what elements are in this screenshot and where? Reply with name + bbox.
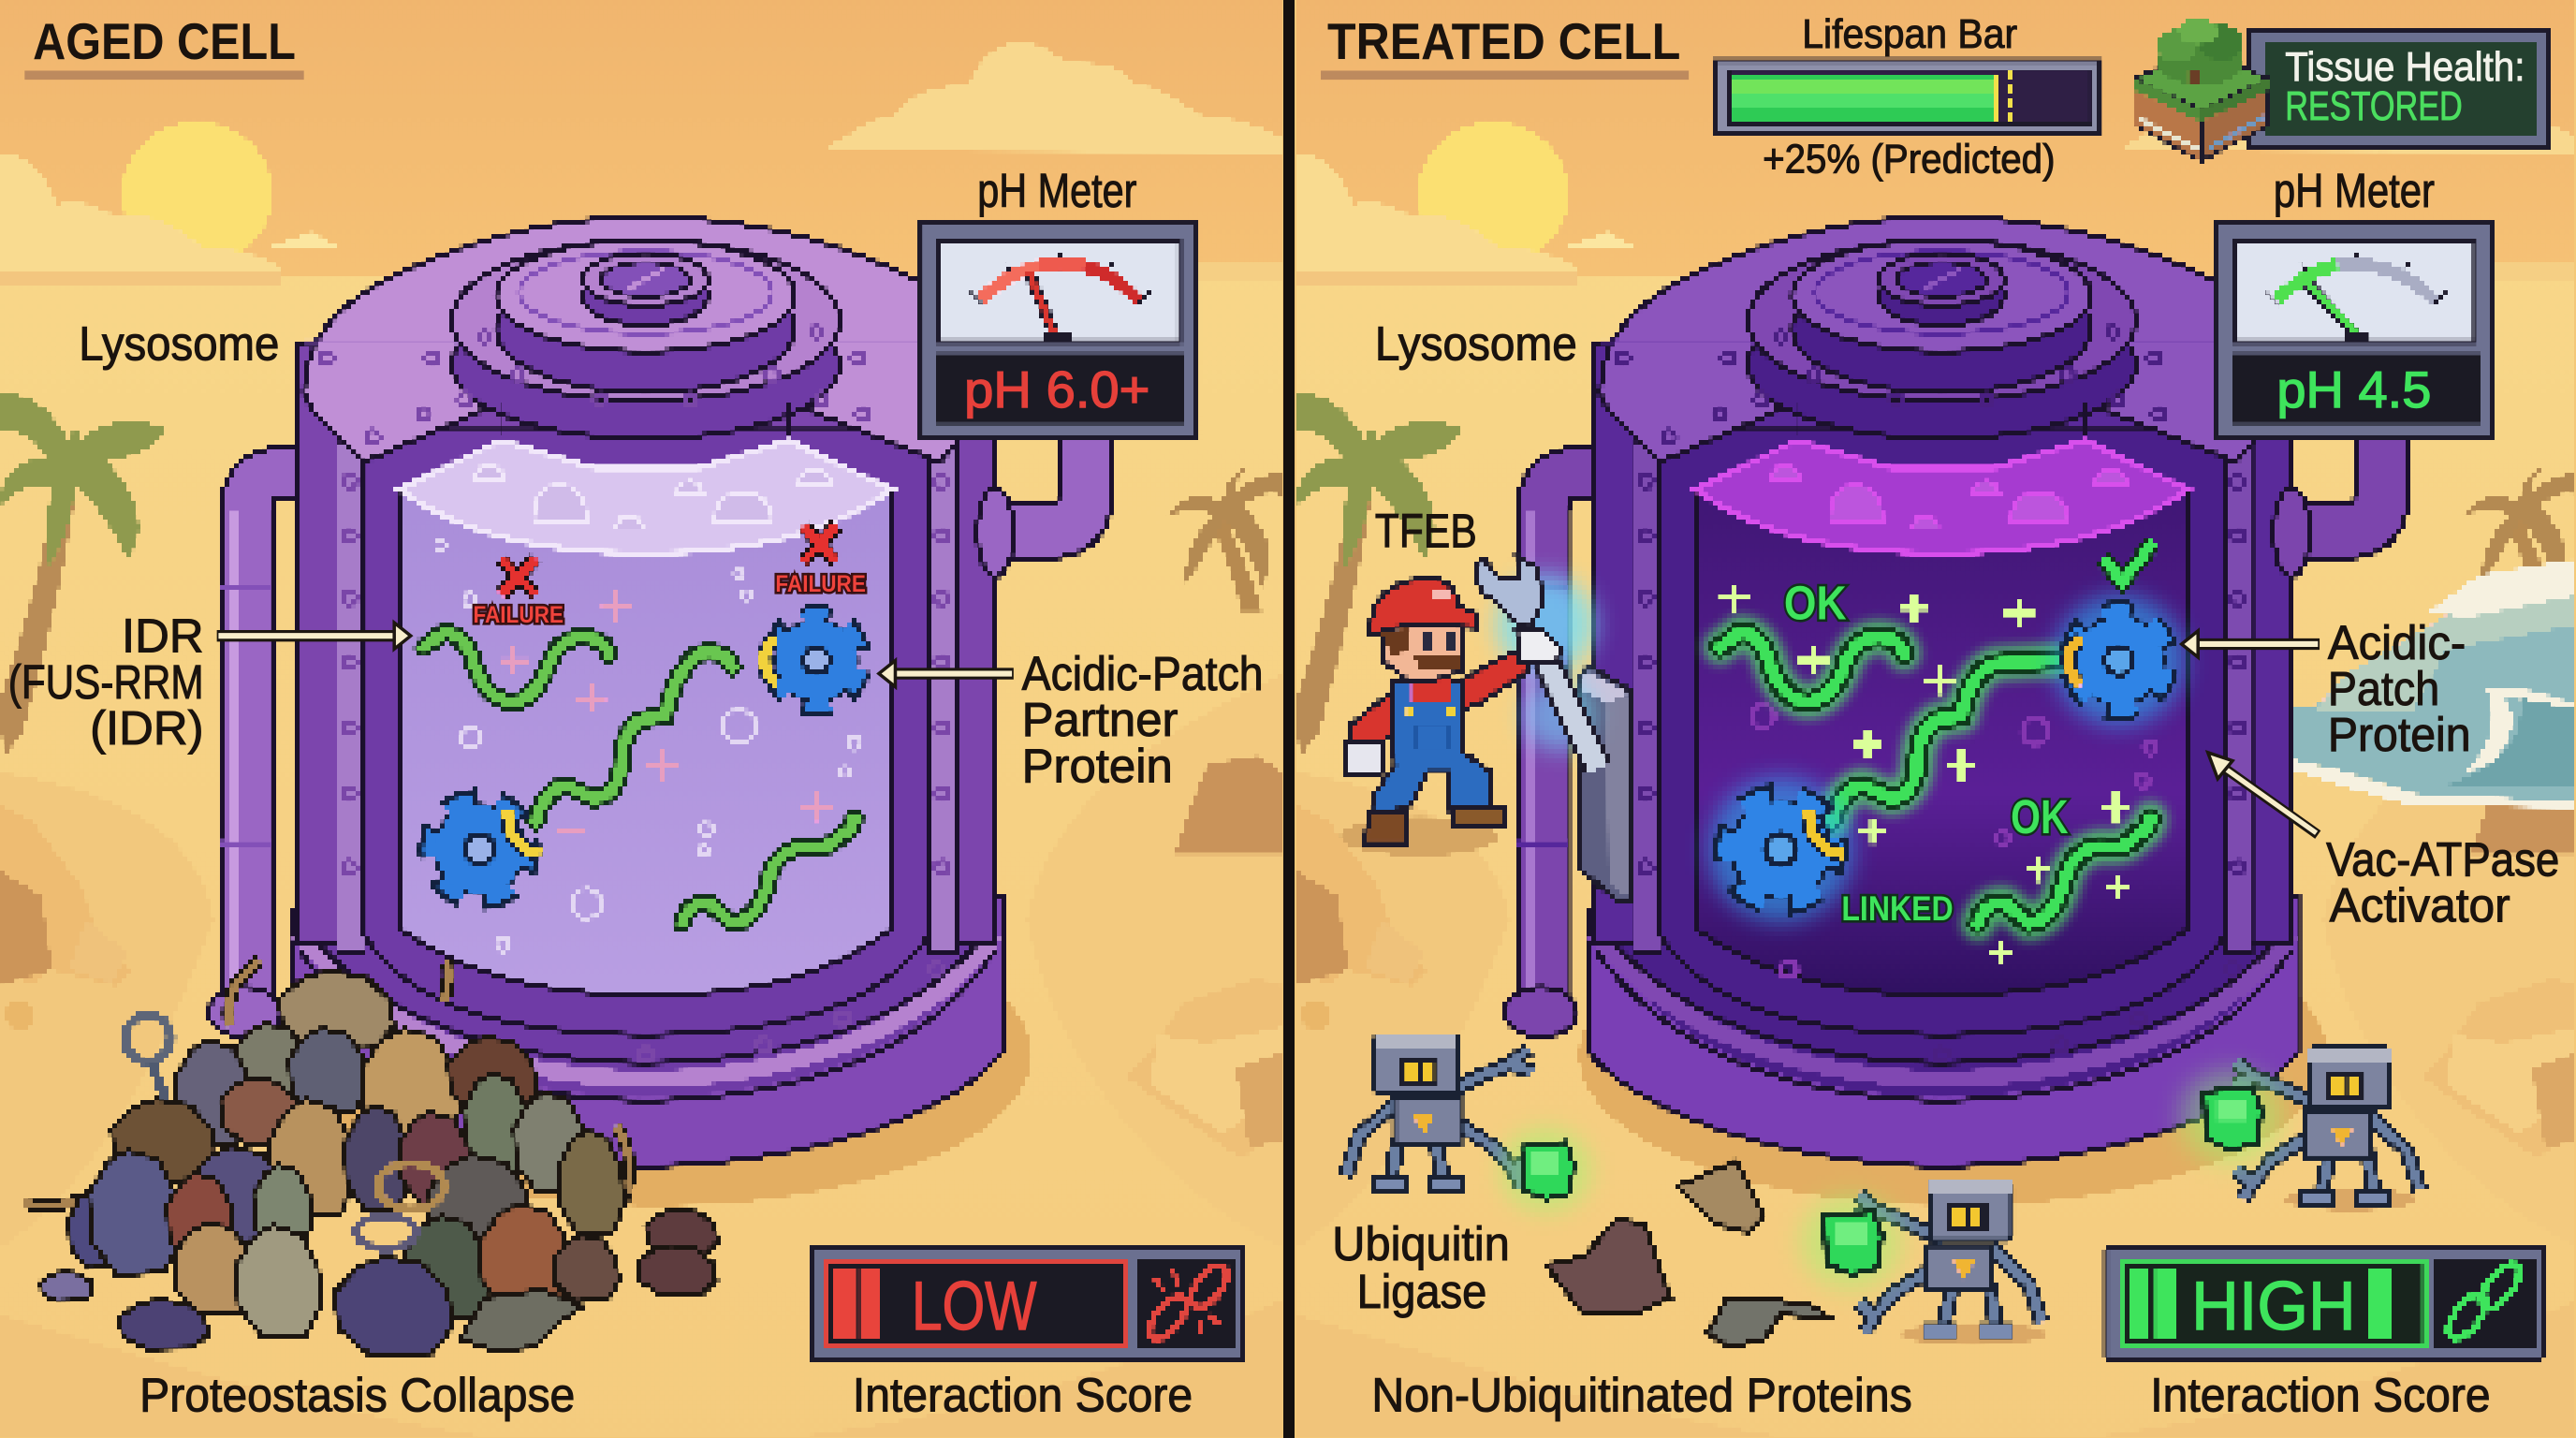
glowing gear proteins (1708, 594, 2185, 922)
linked tag: LINKED (1841, 889, 1954, 928)
bubbles, aged (435, 540, 861, 951)
label: IDR: (IDR) (90, 701, 204, 755)
yellow binding patches (765, 640, 777, 683)
icon: soil and grass block (2134, 18, 2269, 161)
tissue health text: Tissue Health: (2285, 44, 2525, 90)
label: IDR: IDR (122, 609, 204, 663)
sparkle plus marks (1720, 583, 2130, 966)
pH reading green: pH 4.5 (2276, 361, 2431, 418)
label: acidic-patch partner protein (1022, 647, 1264, 792)
green check mark (2102, 542, 2154, 581)
label: lysosome: Lysosome (79, 316, 279, 370)
panel: treated cell scene (1296, 0, 2576, 1438)
protein worms, aged (424, 633, 855, 923)
failure tag left: FAILURE (473, 603, 564, 628)
red failure crosses (501, 526, 836, 594)
label: acidic-patch protein: Acidic- (2328, 616, 2466, 669)
arrow: acidic-patch (879, 661, 1014, 687)
background: desert with sun, clouds and palms (0, 0, 1283, 1438)
label: interaction score treated: Interaction Score (2150, 1369, 2491, 1422)
arrow: IDR (217, 623, 411, 649)
label: TFEB: TFEB (1375, 504, 1477, 557)
label: vac-atpase activator: Activator (2330, 879, 2510, 932)
label: ubiquitin ligase (1332, 1217, 1510, 1318)
ubiquitin ligase robots with green gems (1345, 1035, 2420, 1345)
label: lysosome treated: Lysosome (1375, 316, 1577, 370)
interaction score panel, high (2106, 1247, 2543, 1358)
label: ubiquitin ligase: Ligase (1357, 1265, 1486, 1318)
lifespan bar (1717, 61, 2101, 133)
pH reading red: pH 6.0+ (964, 361, 1149, 418)
gear proteins, aged (766, 609, 867, 712)
label: acidic-patch partner protein: Protein (1022, 739, 1173, 792)
pink charge marks (500, 592, 831, 829)
label: IDR: (FUS-RRM (8, 655, 204, 709)
label: acidic-patch partner protein: Partner (1022, 693, 1178, 746)
mario TFEB mechanic with wrench (1340, 555, 1599, 856)
tissue health text (2285, 44, 2525, 129)
label: acidic-patch protein: Protein (2328, 708, 2471, 761)
failure tag right: FAILURE (775, 572, 866, 597)
pH meter, aged (922, 222, 1197, 437)
sea wave (2290, 559, 2576, 808)
faint bubbles, treated (1751, 705, 2157, 977)
arrow: acidic-patch protein (2182, 631, 2320, 657)
arrow: vac-atpase (2208, 753, 2318, 835)
door on tank (1579, 666, 1630, 902)
label: vac-atpase activator (2326, 832, 2559, 932)
label: lifespan bar: Lifespan Bar (1802, 11, 2017, 57)
tissue health text: RESTORED (2285, 83, 2463, 129)
junk pile: proteostasis collapse (24, 961, 718, 1356)
glowing linked protein worms (1720, 633, 2150, 923)
low reading: LOW (912, 1267, 1037, 1344)
label: interaction score: Interaction Score (853, 1369, 1193, 1422)
lysosome tank, treated (1505, 217, 2382, 1167)
background: desert with sun, clouds and palms, treated (1296, 0, 2576, 1438)
label: pH meter treated: pH Meter (2274, 164, 2435, 217)
tissue health badge (2134, 18, 2550, 161)
title: treated cell: TREATED CELL (1327, 13, 1680, 70)
non-ubiquitinated protein clumps (1545, 1160, 1830, 1347)
divider between panels (1283, 0, 1295, 1438)
OK tag right: OK (2011, 790, 2069, 844)
label: non-ubiquitinated proteins: Non-Ubiquitinated Proteins (1371, 1369, 1912, 1422)
lysosome tank, aged (209, 217, 1086, 1167)
label: acidic-patch partner protein: Acidic-Patch (1022, 647, 1264, 700)
label: pH meter: pH Meter (977, 164, 1137, 217)
pH meter, treated (2217, 222, 2494, 437)
label: acidic-patch protein (2328, 616, 2471, 761)
label: ubiquitin ligase: Ubiquitin (1332, 1217, 1510, 1270)
OK tag left: OK (1784, 577, 1847, 630)
label: proteostasis collapse: Proteostasis Collapse (139, 1369, 575, 1422)
interaction score panel, low (812, 1247, 1244, 1358)
label: predicted lifespan: +25% (Predicted) (1763, 136, 2056, 182)
label: acidic-patch protein: Patch (2328, 662, 2439, 715)
label: IDR (8, 609, 204, 755)
panel: aged cell scene (0, 0, 1283, 1438)
high reading: HIGH (2191, 1267, 2356, 1344)
title: aged cell: AGED CELL (33, 13, 296, 70)
